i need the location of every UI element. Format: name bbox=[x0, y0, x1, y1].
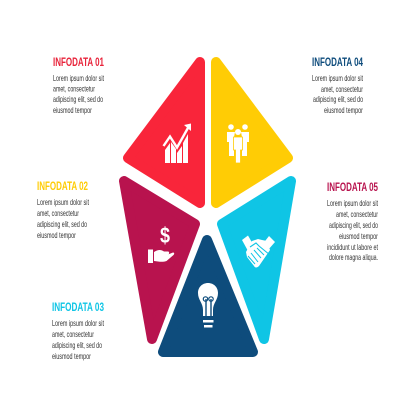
text block: infodata 02: INFODATA 02 bbox=[37, 181, 88, 193]
text block: infodata 01 bbox=[53, 57, 104, 115]
segment: crimson bbox=[124, 181, 195, 339]
text block: infodata 04: INFODATA 04 bbox=[312, 57, 363, 69]
text block: infodata 03: INFODATA 03 bbox=[52, 302, 104, 314]
segment: yellow bbox=[216, 62, 288, 203]
icon: hand holding dollar bbox=[148, 223, 174, 263]
text block: infodata 01: amet, consectetur bbox=[53, 84, 95, 94]
icon: growth chart bbox=[164, 124, 191, 163]
text block: infodata 02: amet, consectetur bbox=[37, 208, 79, 218]
segment: navy bbox=[163, 240, 253, 352]
text block: infodata 03: amet, consectetur bbox=[52, 329, 94, 339]
text block: infodata 01: Lorem ipsum dolor sit bbox=[53, 73, 104, 83]
text block: infodata 05 bbox=[327, 182, 378, 262]
text block: infodata 03: eiusmod tempor bbox=[52, 351, 91, 361]
icon: light bulb bbox=[198, 283, 218, 328]
text block: infodata 01: eiusmod tempor bbox=[53, 105, 92, 115]
text block: infodata 05: eiusmod tempor bbox=[339, 231, 378, 241]
text block: infodata 01: INFODATA 01 bbox=[53, 57, 104, 69]
text block: infodata 05: incididunt ut labore et bbox=[327, 242, 378, 252]
text block: infodata 02: Lorem ipsum dolor sit bbox=[37, 197, 89, 207]
icon: handshake bbox=[242, 236, 275, 268]
text block: infodata 05: INFODATA 05 bbox=[327, 182, 378, 194]
text block: infodata 04: adipiscing elit, sed do bbox=[313, 94, 363, 104]
pentagon diagram bbox=[124, 62, 291, 352]
text block: infodata 04: amet, consectetur bbox=[321, 84, 363, 94]
icon: group of people bbox=[227, 124, 249, 163]
text block: infodata 02: adipiscing elit, sed do bbox=[37, 219, 87, 229]
text block: infodata 01: adipiscing elit, sed do bbox=[53, 94, 103, 104]
segment: red bbox=[128, 62, 200, 203]
text block: infodata 02 bbox=[37, 181, 89, 240]
text block: infodata 02: eiusmod tempor bbox=[37, 230, 76, 240]
text block: infodata 04: eiusmod tempor bbox=[324, 105, 363, 115]
text block: infodata 03: Lorem ipsum dolor sit bbox=[52, 318, 104, 328]
text block: infodata 03 bbox=[52, 302, 104, 361]
text block: infodata 05: dolore magna aliqua. bbox=[329, 252, 378, 262]
text block: infodata 04 bbox=[312, 57, 363, 115]
text block: infodata 05: amet, consectetur bbox=[336, 209, 378, 219]
text block: infodata 03: adipiscing elit, sed do bbox=[52, 340, 102, 350]
segment: cyan bbox=[222, 181, 291, 339]
text block: infodata 05: adipiscing elit, sed do bbox=[329, 220, 378, 230]
text block: infodata 05: Lorem ipsum dolor sit bbox=[327, 198, 378, 208]
text block: infodata 04: Lorem ipsum dolor sit bbox=[312, 73, 363, 83]
icon: hand holding dollar: $ bbox=[160, 223, 170, 248]
